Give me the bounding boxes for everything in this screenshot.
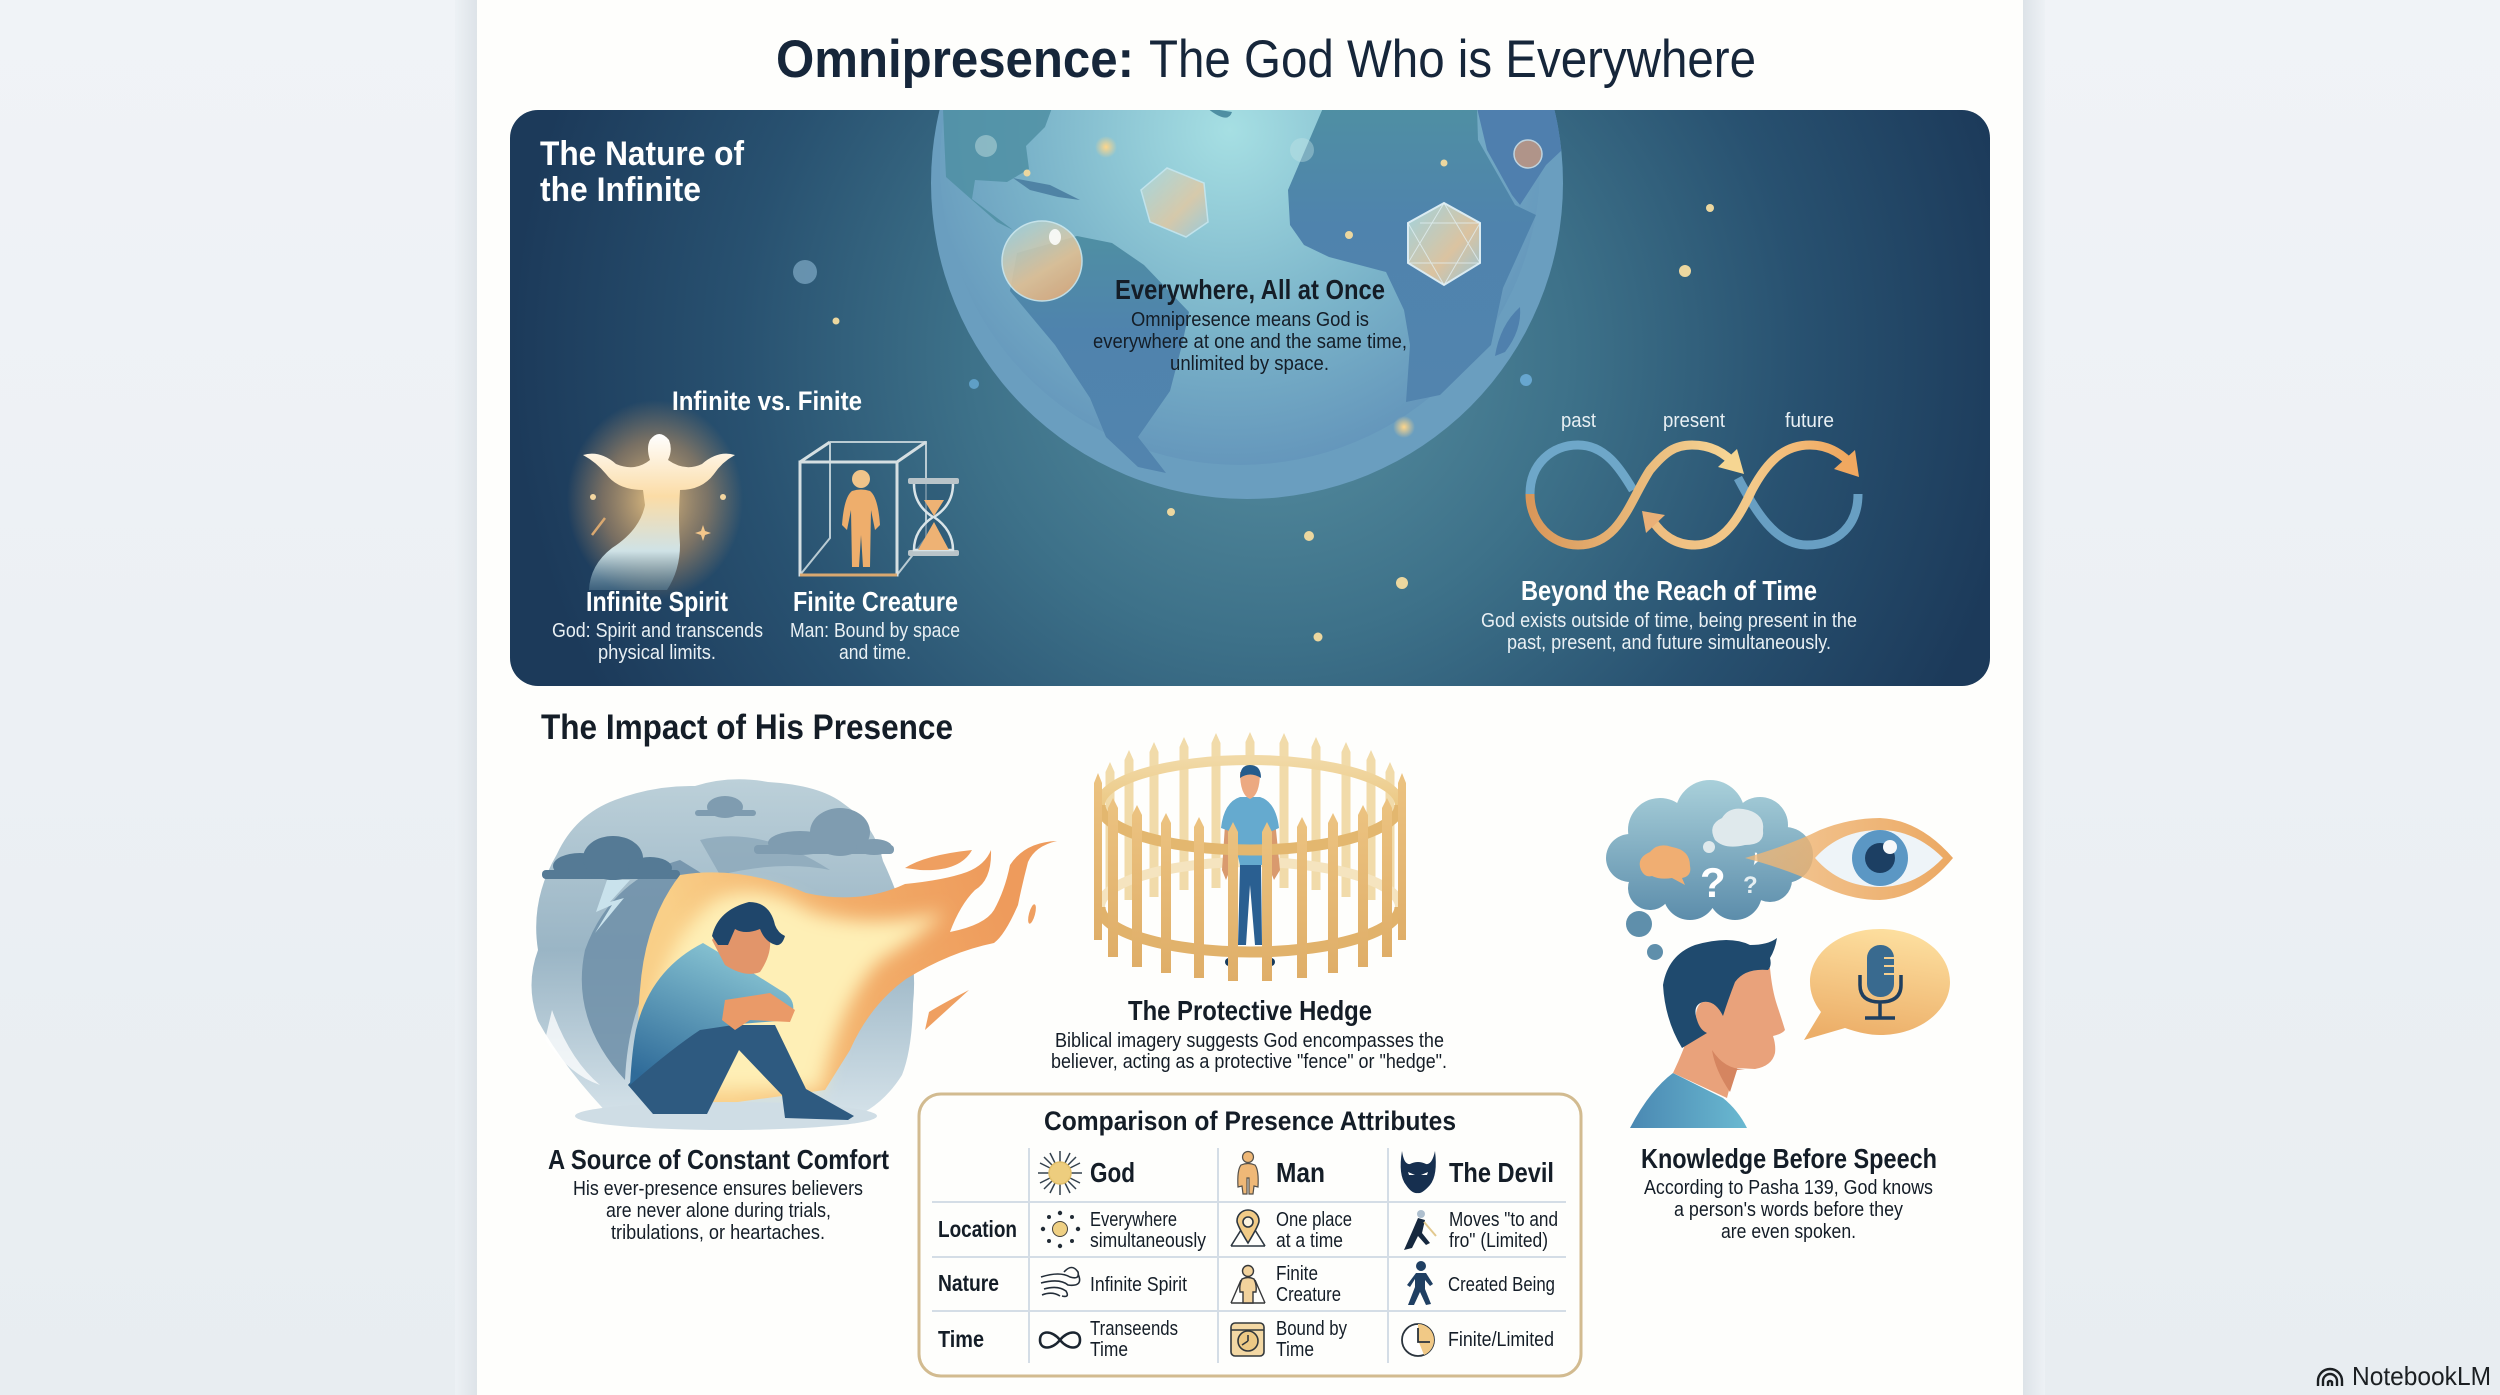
seated figure xyxy=(628,902,854,1120)
thought contents: ? xyxy=(1743,872,1758,899)
icon: finite man on path xyxy=(1231,1266,1265,1303)
lightning xyxy=(595,880,630,933)
column heads xyxy=(1090,1157,1554,1188)
text block: a source of constant comfort: A Source of Constant Comfort xyxy=(548,1144,889,1175)
column heads: Man xyxy=(1276,1157,1325,1188)
table cells: Bound by xyxy=(1276,1318,1347,1340)
thought contents: ? xyxy=(1700,859,1726,906)
person inside xyxy=(1221,765,1280,966)
text block: the protective hedge: Biblical imagery suggests God encompasses the xyxy=(1055,1030,1444,1052)
text block: finite creature xyxy=(790,586,960,664)
title xyxy=(776,30,1756,89)
text block: finite creature: Finite Creature xyxy=(793,586,958,617)
table cells: fro" (Limited) xyxy=(1449,1230,1548,1252)
section heading: the nature of the infinite: The Nature of xyxy=(540,135,745,173)
row heads: Nature xyxy=(938,1270,999,1296)
infinity timeline labels xyxy=(1561,410,1834,432)
text block: beyond the reach of time: Beyond the Reach of Time xyxy=(1521,575,1817,606)
icon: map pin xyxy=(1231,1210,1265,1246)
icon: wind xyxy=(1041,1268,1080,1296)
row heads: Location xyxy=(938,1216,1017,1242)
table cells xyxy=(1090,1209,1558,1361)
icon: moving figure xyxy=(1404,1210,1436,1250)
table cells: Time xyxy=(1276,1339,1314,1361)
text block: knowledge before speech: are even spoken. xyxy=(1721,1221,1856,1243)
text block: knowledge before speech xyxy=(1641,1143,1937,1243)
infinity timeline labels: past xyxy=(1561,410,1596,432)
back rails xyxy=(1100,760,1400,805)
icon: infinity xyxy=(1040,1332,1080,1348)
text block: infinite spirit: Infinite Spirit xyxy=(586,586,728,617)
section heading: the nature of the infinite: the Infinite xyxy=(540,171,701,209)
panel: the nature of the infinite xyxy=(510,110,1990,686)
front rails xyxy=(1100,805,1400,850)
column heads: The Devil xyxy=(1449,1157,1554,1188)
text block: a source of constant comfort xyxy=(548,1144,889,1244)
text block: finite creature: Man: Bound by space xyxy=(790,620,960,642)
table cells: Finite xyxy=(1276,1263,1318,1285)
text block: beyond the reach of time: God exists outside of time, being present in the xyxy=(1481,610,1857,632)
icon: clock xyxy=(1402,1324,1434,1356)
thought contents xyxy=(1640,809,1763,906)
dark swirl xyxy=(582,860,745,1080)
title: Omnipresence: xyxy=(776,30,1134,89)
icon: sun xyxy=(1038,1151,1082,1195)
text block: beyond the reach of time xyxy=(1481,575,1857,654)
text block: infinite spirit: physical limits. xyxy=(598,642,716,664)
icon: speech bubble with microphone xyxy=(1804,929,1950,1040)
globe xyxy=(931,110,1563,499)
table cells: Time xyxy=(1090,1339,1128,1361)
icon: radiant sun location xyxy=(1041,1211,1080,1248)
table cells: at a time xyxy=(1276,1230,1343,1252)
table cells: Everywhere xyxy=(1090,1209,1177,1231)
row heads xyxy=(938,1216,1017,1352)
clouds xyxy=(542,796,894,880)
text block: knowledge before speech: Knowledge Before Speech xyxy=(1641,1143,1937,1174)
thought cloud xyxy=(1606,780,1813,960)
column heads: God xyxy=(1090,1157,1135,1188)
text block: infinite spirit: God: Spirit and transcends xyxy=(552,620,763,642)
front posts xyxy=(1094,773,1406,981)
golden light points xyxy=(832,136,1714,642)
table cells: Infinite Spirit xyxy=(1090,1274,1187,1296)
table cells: Created Being xyxy=(1448,1274,1555,1296)
icon: walking person xyxy=(1407,1261,1433,1305)
icon: man xyxy=(1238,1152,1258,1194)
storm swirl xyxy=(532,779,914,1121)
text block: everywhere, all at once: Omnipresence means God is xyxy=(1131,309,1369,331)
arrow: infinity loop through past present future xyxy=(1530,445,1859,545)
subheading: infinite vs finite: Infinite vs. Finite xyxy=(672,386,862,416)
icon: devil xyxy=(1401,1151,1436,1193)
panel: comparison table xyxy=(919,1094,1581,1376)
ground shadow xyxy=(575,1102,877,1130)
text block: a source of constant comfort: are never alone during trials, xyxy=(606,1200,831,1222)
person profile xyxy=(1630,938,1785,1128)
table title: Comparison of Presence Attributes xyxy=(1044,1106,1456,1136)
illustration: person comforted amid storm and flame xyxy=(532,779,1057,1130)
text block: the protective hedge: believer, acting as a protective "fence" or "hedge". xyxy=(1051,1051,1447,1073)
back posts xyxy=(1106,732,1394,900)
table cells: simultaneously xyxy=(1090,1230,1206,1252)
table cells: Transeends xyxy=(1090,1318,1178,1340)
icon: calendar clock xyxy=(1231,1323,1264,1356)
text block: infinite spirit xyxy=(552,586,763,664)
text block: everywhere, all at once xyxy=(1093,274,1407,375)
inner glow xyxy=(652,892,945,1090)
section heading: the impact of his presence: The Impact of His Presence xyxy=(541,708,953,747)
flame xyxy=(638,841,1057,1110)
section heading: the nature of the infinite xyxy=(540,135,745,209)
text block: finite creature: and time. xyxy=(839,642,911,664)
icon: all-seeing eye xyxy=(1745,818,1953,900)
text block: knowledge before speech: According to Pasha 139, God knows xyxy=(1644,1177,1933,1199)
text block: the protective hedge xyxy=(1051,995,1447,1073)
text block: knowledge before speech: a person's words before they xyxy=(1674,1199,1903,1221)
infinity timeline labels: present xyxy=(1663,410,1725,432)
text block: beyond the reach of time: past, present, and future simultaneously. xyxy=(1507,632,1831,654)
text block: everywhere, all at once: Everywhere, All at Once xyxy=(1115,274,1385,305)
NotebookLM watermark: NotebookLM xyxy=(2352,1361,2491,1391)
illustration: protective hedge fence around a person xyxy=(1094,732,1406,981)
table cells: Creature xyxy=(1276,1284,1341,1306)
text block: everywhere, all at once: everywhere at one and the same time, xyxy=(1093,331,1407,353)
text block: a source of constant comfort: tribulations, or heartaches. xyxy=(611,1222,825,1244)
table cells: One place xyxy=(1276,1209,1352,1231)
title: The God Who is Everywhere xyxy=(1149,30,1756,89)
row heads: Time xyxy=(938,1326,984,1352)
table cells: Moves "to and xyxy=(1449,1209,1558,1231)
infinity timeline labels: future xyxy=(1785,410,1834,432)
floating bubbles and crystals xyxy=(793,135,1542,389)
text block: everywhere, all at once: unlimited by space. xyxy=(1170,353,1329,375)
icon: finite creature in a box with hourglass xyxy=(800,442,959,575)
text block: a source of constant comfort: His ever-presence ensures believers xyxy=(573,1178,863,1200)
illustration: knowledge before speech xyxy=(1606,780,1953,1128)
icon: infinite spirit figure xyxy=(567,400,743,600)
table cells: Finite/Limited xyxy=(1448,1329,1554,1351)
text block: the protective hedge: The Protective Hedge xyxy=(1128,995,1372,1026)
